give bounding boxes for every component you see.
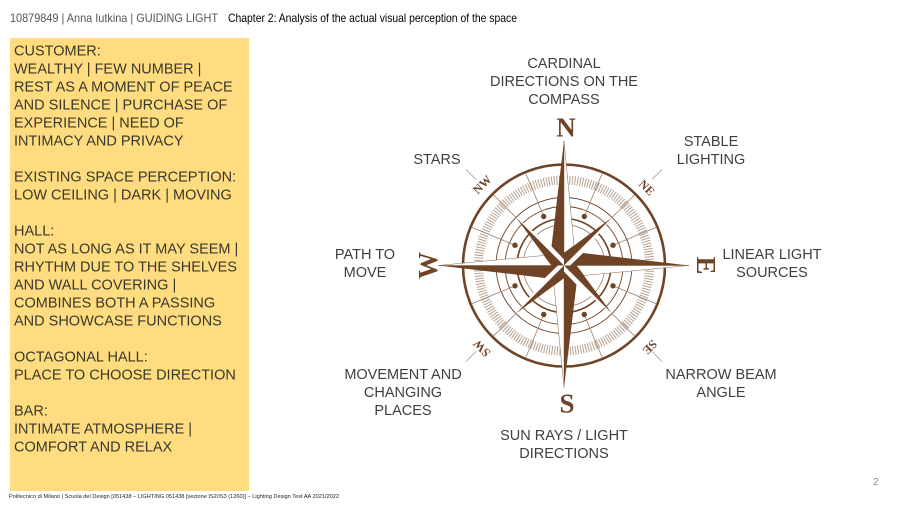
text: customer: INTIMACY AND PRIVACY (14, 134, 184, 150)
text: octagonal hall: OCTAGONAL HALL: (14, 350, 148, 366)
label: stable lighting: STABLE (684, 134, 739, 150)
compass rose (413, 112, 721, 418)
header: author and project: 10879849 | Anna Iutkina | GUIDING LIGHT (10, 11, 219, 25)
label: path to move: PATH TO (335, 247, 395, 263)
text: customer: REST AS A MOMENT OF PEACE (14, 80, 233, 96)
label: cardinal directions: CARDINAL (527, 56, 601, 72)
text: customer: EXPERIENCE | NEED OF (14, 116, 184, 132)
text: customer: WEALTHY | FEW NUMBER | (14, 62, 201, 78)
label: cardinal directions: COMPASS (528, 92, 600, 108)
text: existing space perception: LOW CEILING | DARK | MOVING (14, 188, 232, 204)
diagonal star brown halves (516, 218, 612, 314)
text: customer (14, 44, 233, 150)
label: narrow beam angle: ANGLE (696, 385, 746, 401)
compass radial lines (472, 173, 656, 358)
label: cardinal directions (490, 56, 638, 108)
cardinal letter W: W (413, 252, 443, 279)
footer: Politecnico di Milano | Scuola del Design [051438 – LIGHTING 051438 [sezione IS2/IS3 (1260)] – Lighting Design Test AA 2021/2022 (9, 494, 339, 500)
label: movement and changing places (344, 367, 462, 419)
label: cardinal directions: DIRECTIONS ON THE (490, 74, 638, 90)
main star white halves (438, 140, 689, 388)
intercardinal letters: SE (640, 337, 660, 357)
text: hall (14, 224, 238, 330)
panel: project notes (10, 38, 249, 491)
text: bar: INTIMATE ATMOSPHERE | (14, 422, 192, 438)
label: path to move (335, 247, 395, 281)
text: hall: COMBINES BOTH A PASSING (14, 296, 215, 312)
label: movement and changing places: MOVEMENT AND (344, 367, 462, 383)
text: octagonal hall (14, 350, 236, 384)
text: existing space perception: EXISTING SPACE PERCEPTION: (14, 170, 236, 186)
text: octagonal hall: PLACE TO CHOOSE DIRECTION (14, 368, 236, 384)
label: stable lighting (677, 134, 745, 168)
label: stable lighting: LIGHTING (677, 152, 745, 168)
label: path to move: MOVE (344, 265, 387, 281)
label: sun rays / light directions: DIRECTIONS (519, 446, 609, 462)
page number: 2 (873, 477, 879, 488)
compass diagonal tick accents (500, 202, 628, 330)
label: narrow beam angle: NARROW BEAM (665, 367, 777, 383)
text: hall: NOT AS LONG AS IT MAY SEEM | (14, 242, 238, 258)
label: linear light sources: SOURCES (736, 265, 808, 281)
intercardinal letters (470, 172, 660, 360)
text: customer: AND SILENCE | PURCHASE OF (14, 98, 227, 114)
intercardinal letters: NE (636, 177, 658, 199)
outer diagonal ticks (466, 170, 662, 362)
intercardinal letters: NW (470, 172, 494, 197)
text: hall: AND SHOWCASE FUNCTIONS (14, 314, 222, 330)
text: bar (14, 404, 192, 456)
label: linear light sources: LINEAR LIGHT (722, 247, 822, 263)
cardinal letter E: E (691, 256, 721, 275)
label: stars: STARS (413, 152, 461, 168)
text: hall: HALL: (14, 224, 54, 240)
text: hall: RHYTHM DUE TO THE SHELVES (14, 260, 237, 276)
text: customer: CUSTOMER: (14, 44, 101, 60)
text: existing space perception (14, 170, 236, 204)
text: bar: BAR: (14, 404, 48, 420)
cardinal letter S: S (559, 388, 575, 418)
label: narrow beam angle (665, 367, 777, 401)
label: linear light sources (722, 247, 822, 281)
text: hall: AND WALL COVERING | (14, 278, 176, 294)
cardinal letter N: N (556, 112, 576, 142)
label: sun rays / light directions (500, 428, 628, 462)
diagonal star white halves (516, 218, 612, 314)
text: bar: COMFORT AND RELAX (14, 440, 173, 456)
compass rings (463, 164, 665, 366)
compass dots (512, 214, 616, 317)
label: sun rays / light directions: SUN RAYS / LIGHT (500, 428, 628, 444)
label: movement and changing places: PLACES (374, 403, 432, 419)
header: chapter title: Chapter 2: Analysis of the actual visual perception of the space (228, 11, 517, 25)
label: movement and changing places: CHANGING (364, 385, 442, 401)
intercardinal letters: SW (470, 337, 493, 360)
main star brown halves (438, 140, 689, 388)
